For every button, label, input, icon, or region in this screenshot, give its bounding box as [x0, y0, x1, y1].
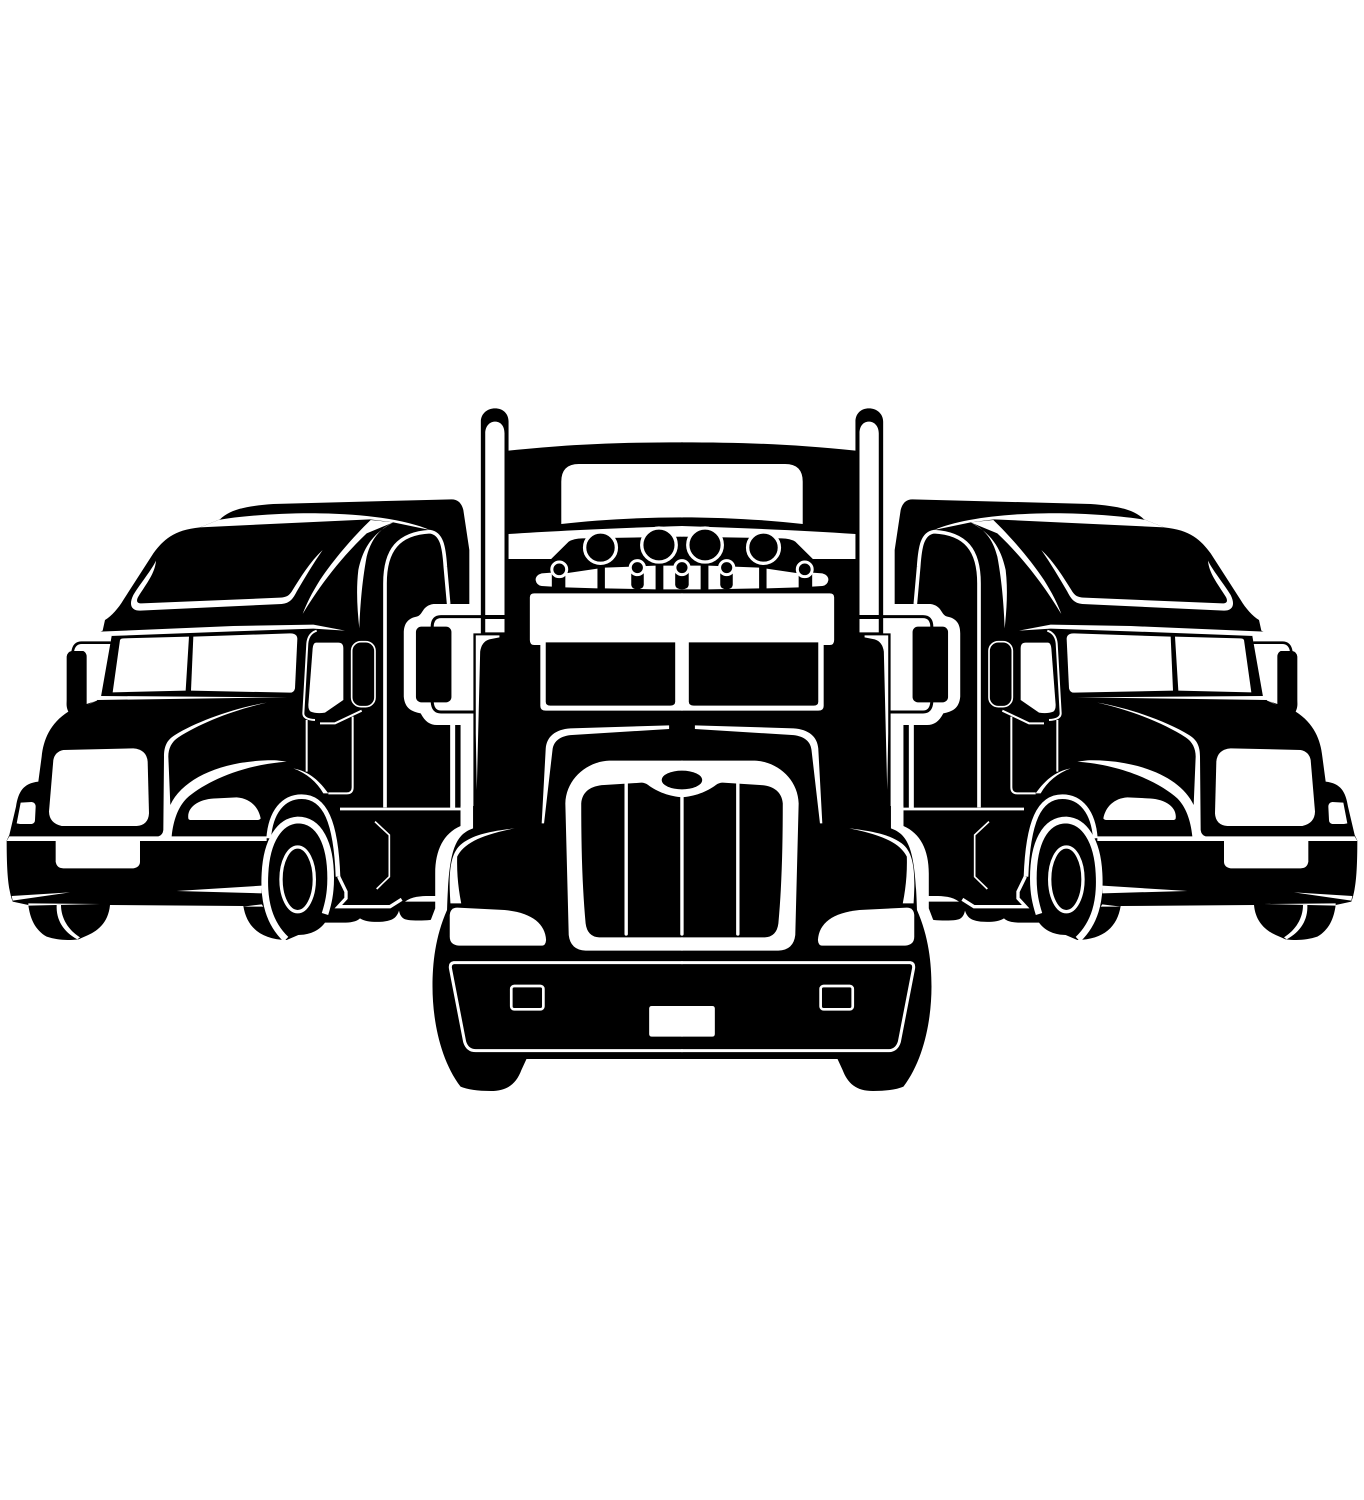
grille frame: [565, 761, 683, 951]
wheel arch and chassis line: [269, 797, 338, 877]
light bar: [536, 566, 683, 589]
door outline: [303, 631, 362, 793]
roof line: [200, 513, 430, 530]
license plate: [56, 841, 140, 868]
hood top line: [87, 696, 287, 705]
fender arc end: [293, 768, 328, 793]
mirror arms: [432, 617, 504, 712]
grille bar: [621, 783, 631, 934]
big lights: [585, 528, 676, 563]
truck: left: [7, 499, 500, 940]
center truck body left: [404, 408, 683, 1091]
windshield left pane: [113, 637, 189, 692]
lower details: [450, 725, 683, 1051]
visor line: [100, 625, 345, 636]
bumper lines: [12, 886, 263, 907]
small lights: [552, 561, 644, 577]
lower body with hood halo: [429, 806, 683, 1091]
center truck body right: [681, 408, 960, 1091]
mirror arm: [73, 643, 111, 652]
windshield right pane: [191, 633, 297, 693]
cab contour lines: [303, 520, 393, 614]
license plate: [649, 1006, 683, 1037]
headlight: [49, 748, 149, 826]
door window: [308, 643, 343, 713]
center light: [675, 561, 689, 589]
roof window line: [131, 550, 323, 611]
tire ring: [265, 820, 331, 939]
light stem: [631, 572, 644, 589]
grille center bar and emblem: [662, 771, 702, 934]
windshield pane: [546, 642, 675, 706]
sun visor and window frame: [530, 593, 683, 711]
side mirror small: [352, 642, 375, 707]
truck: right: [864, 499, 1357, 940]
marker light: [17, 802, 36, 824]
exhaust pipe: [485, 422, 504, 632]
hood stripe: [7, 703, 287, 841]
body lines: [340, 805, 462, 813]
silhouette: [7, 499, 500, 940]
hub ring: [281, 847, 314, 912]
bumper outline: [450, 963, 683, 1051]
center truck details right: [681, 422, 948, 1051]
cab side sliver: [476, 635, 499, 790]
upper body with mirror halo: [404, 408, 683, 833]
hood contour: [450, 828, 515, 903]
center truck details left: [416, 422, 683, 1051]
roof window: [561, 464, 683, 524]
fog lamp: [188, 797, 261, 820]
upper details: [416, 422, 683, 790]
sleeper door outline: [385, 532, 449, 807]
fog light: [511, 986, 543, 1009]
brow line: [542, 725, 669, 823]
mirror: [416, 627, 451, 702]
headlight: [450, 908, 546, 946]
white band: [509, 526, 683, 559]
far tire line: [57, 905, 80, 939]
